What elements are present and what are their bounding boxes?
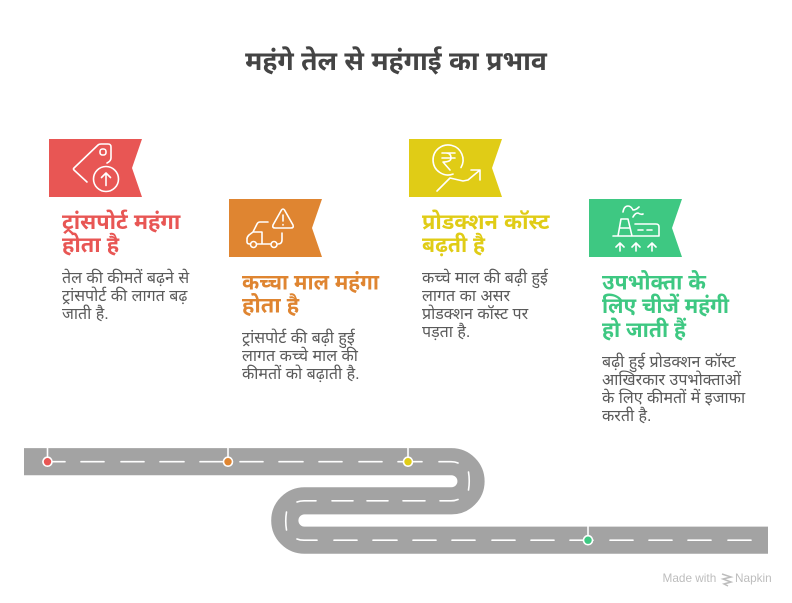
icon: rupee with rising chart [433, 145, 480, 191]
banner: production [409, 139, 502, 197]
heading: consumer: हो जाती हैं [602, 317, 687, 342]
banner: raw material [229, 199, 322, 257]
road timeline [24, 448, 768, 545]
title: महंगे तेल से महंगाई का प्रभाव [245, 45, 548, 76]
text: production: कच्चे माल की बढ़ी हुई [422, 268, 549, 289]
marker: green [584, 526, 592, 545]
heading: raw material [242, 270, 380, 318]
footer: made with Napkin: Made with [662, 571, 716, 585]
icon: price tag with up arrow [74, 144, 118, 192]
panel: raw material [229, 199, 380, 383]
heading: consumer [602, 270, 730, 342]
panel: production [409, 139, 551, 341]
text: consumer: के लिए कीमतों में इजाफा [602, 388, 746, 407]
text: production: लागत का असर [422, 288, 510, 305]
road surface [24, 462, 768, 540]
text: raw material [242, 328, 360, 383]
heading: production: प्रोडक्शन कॉस्ट [422, 209, 551, 234]
icon: napkin [722, 574, 731, 586]
heading: production: बढ़ती है [422, 231, 486, 258]
panel: transport [49, 139, 190, 323]
heading: consumer: लिए चीजें महंगी [602, 293, 730, 318]
text: production [422, 268, 549, 341]
heading: transport: होता है [62, 231, 120, 257]
text: production: पड़ता है. [422, 322, 470, 341]
banner: consumer [589, 199, 682, 257]
text: production: प्रोडक्शन कॉस्ट पर [422, 305, 529, 323]
heading: raw material: कच्चा माल महंगा [242, 270, 380, 294]
text: raw material: लागत कच्चे माल की [242, 346, 359, 365]
marker: red [43, 448, 52, 466]
text: raw material: ट्रांसपोर्ट की बढ़ी हुई [242, 328, 356, 349]
road centre dashes [43, 462, 751, 540]
text: transport: ट्रांसपोर्ट की लागत बढ़ [62, 286, 188, 305]
heading: transport: ट्रांसपोर्ट महंगा [62, 209, 181, 235]
banner: transport [49, 139, 142, 197]
footer: made with Napkin [662, 571, 772, 586]
text: transport: तेल की कीमतें बढ़ने से [62, 268, 190, 287]
text: consumer: करती है. [602, 406, 651, 425]
icon: truck with warning [247, 209, 293, 248]
heading: raw material: होता है [242, 292, 300, 318]
marker: yellow [404, 448, 412, 466]
footer: made with Napkin: Napkin [735, 571, 772, 585]
heading: transport [62, 209, 181, 257]
text: consumer: आखिरकार उपभोक्ताओं [602, 370, 742, 389]
heading: consumer: उपभोक्ता के [602, 270, 707, 294]
text: transport [62, 268, 190, 323]
icon: factory with up arrows [613, 206, 659, 251]
heading: production [422, 209, 551, 258]
text: consumer [602, 352, 746, 425]
panel: consumer [589, 199, 746, 425]
text: raw material: कीमतों को बढ़ाती है. [242, 364, 360, 383]
text: transport: जाती है. [62, 304, 109, 323]
text: consumer: बढ़ी हुई प्रोडक्शन कॉस्ट [602, 352, 737, 373]
marker: orange [224, 448, 232, 466]
